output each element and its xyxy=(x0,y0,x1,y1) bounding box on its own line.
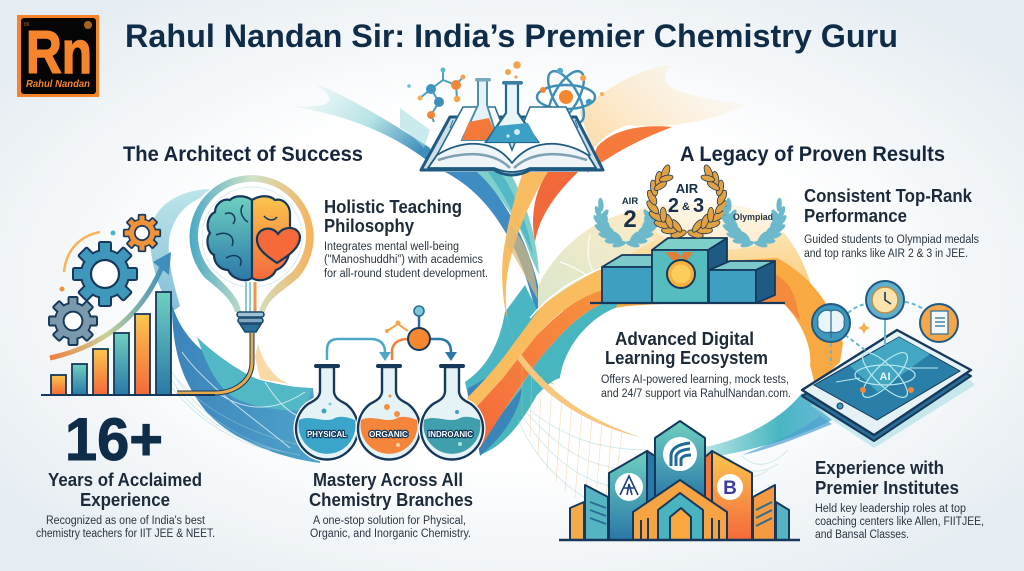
text: holistic teaching: Integrates mental well-being xyxy=(324,241,459,253)
wreath: AIR 2 & 3: AIR xyxy=(676,181,699,196)
icon: light bulb brain and heart xyxy=(190,175,314,332)
icon: tablet xyxy=(802,330,975,448)
central strands from book xyxy=(477,172,539,275)
lower teal xyxy=(700,393,832,459)
text: mastery across branches: Organic, and Inorganic Chemistry. xyxy=(310,528,471,540)
panel: chemistry branches xyxy=(296,306,483,540)
title: Rahul Nandan Sir: India’s Premier Chemistry Guru xyxy=(125,18,898,54)
icon: document circle xyxy=(920,304,958,342)
icon: physical flask xyxy=(296,364,358,459)
logo: Rn: 86 xyxy=(24,22,30,28)
panel: 16+ years xyxy=(36,215,215,540)
wreath: AIR 2: 2 xyxy=(623,206,637,233)
wreath: AIR 2 xyxy=(592,196,660,249)
AI atom: AI xyxy=(880,371,890,383)
icon: organic flask xyxy=(358,364,420,459)
text: consistent top rank: Consistent Top-Rank xyxy=(804,186,973,206)
panel: consistent top-rank performance xyxy=(590,164,979,303)
text: mastery across branches: Chemistry Branches xyxy=(309,490,473,510)
text: premier institutes xyxy=(815,458,984,541)
text: premier institutes: Held key leadership roles at top xyxy=(815,503,966,515)
text: years of experience: Recognized as one of India's best xyxy=(46,515,206,527)
upper swooshes xyxy=(287,83,438,170)
text: advanced digital: Advanced Digital xyxy=(615,329,754,349)
text: mastery across branches: A one-stop solution for Physical, xyxy=(313,515,466,527)
white centre xyxy=(560,303,810,447)
text: premier institutes: and Bansal Classes. xyxy=(815,529,909,541)
text: years of experience: Years of Acclaimed xyxy=(48,470,202,490)
icon: podium xyxy=(590,238,785,303)
wreath: AIR 2 & 3: & xyxy=(679,201,693,213)
text: holistic teaching: Holistic Teaching xyxy=(324,197,462,217)
icon: inorganic flask xyxy=(421,364,483,459)
brain left half xyxy=(207,196,252,280)
logo: Rn: Rn xyxy=(26,19,92,86)
logo: Rn xyxy=(17,15,99,97)
book cover xyxy=(421,117,603,175)
section heading: A Legacy of Proven Results: A Legacy of Proven Results xyxy=(680,143,945,166)
text: holistic teaching: Philosophy xyxy=(324,216,414,236)
text: holistic teaching xyxy=(324,197,488,280)
section heading: The Architect of Success: The Architect of Success xyxy=(123,143,363,166)
text: consistent top rank xyxy=(804,186,979,260)
wreath: AIR 2: AIR xyxy=(622,196,638,207)
flask labels: INDROANIC xyxy=(428,430,473,439)
icon: buildings xyxy=(559,421,800,540)
mesh line fan xyxy=(172,353,788,510)
atom xyxy=(537,66,604,128)
orange flask xyxy=(462,80,498,140)
main diagonal bands xyxy=(480,298,620,455)
icon: brain circle xyxy=(812,304,850,342)
wreath: AIR 2 & 3: 3 xyxy=(693,195,704,217)
wreath: AIR 2 & 3: 2 xyxy=(668,195,679,217)
panel: digital learning ecosystem xyxy=(601,281,975,448)
panel: premier institutes xyxy=(559,421,984,541)
logo B xyxy=(717,474,743,500)
flask labels xyxy=(307,430,473,439)
icon: clock circle xyxy=(866,281,904,319)
text: holistic teaching: for all-round student development. xyxy=(324,268,488,280)
icon: wire from bulb xyxy=(177,333,252,393)
text: holistic teaching: ("Manoshuddhi") with academics xyxy=(324,254,483,266)
icon: open book with flasks and atom xyxy=(407,61,604,175)
left arc ribbon xyxy=(150,189,210,312)
text: mastery across branches: Mastery Across All xyxy=(313,470,463,490)
wreath: AIR 2 & 3 xyxy=(645,164,729,240)
text: advanced digital xyxy=(601,329,791,400)
orange gear xyxy=(124,215,160,251)
teal flask xyxy=(486,83,538,142)
text: premier institutes: Premier Institutes xyxy=(815,478,959,498)
gray gear xyxy=(49,297,97,345)
text: years of experience: Experience xyxy=(80,490,170,510)
wreath: Olympiad: Olympiad xyxy=(733,212,773,222)
orange ring top xyxy=(600,258,843,385)
icon: connecting arrows xyxy=(327,306,457,361)
text: years of experience xyxy=(36,470,215,540)
AI atom xyxy=(836,347,938,403)
logo A xyxy=(615,473,643,501)
text: consistent top rank: Guided students to Olympiad medals xyxy=(804,234,979,246)
icon: sparkle xyxy=(858,322,870,334)
bar chart with arrow xyxy=(41,252,215,395)
blue gear xyxy=(73,242,137,306)
text: mastery across branches xyxy=(309,470,473,540)
text: consistent top rank: Performance xyxy=(804,206,907,226)
text: premier institutes: Experience with xyxy=(815,458,944,478)
big number: 16+ xyxy=(65,406,163,473)
connectors xyxy=(831,302,930,365)
flowing ribbons background xyxy=(150,65,843,463)
panel: holistic teaching philosophy xyxy=(190,175,488,332)
heart xyxy=(257,228,300,263)
molecule xyxy=(407,68,466,122)
flask labels: ORGANIC xyxy=(369,430,408,439)
logo F xyxy=(663,437,697,471)
logo: Rn: Rahul Nandan xyxy=(26,79,90,90)
text: premier institutes: coaching centers like Allen, FIITJEE, xyxy=(815,516,984,528)
front pages xyxy=(428,144,596,172)
text: advanced digital: and 24/7 support via RahulNandan.com. xyxy=(601,388,791,400)
brain right half xyxy=(252,196,290,280)
logo B: B xyxy=(723,478,737,499)
text: advanced digital: Learning Ecosystem xyxy=(605,348,768,368)
flask labels: PHYSICAL xyxy=(307,430,347,439)
text: advanced digital: Offers AI-powered learning, mock tests, xyxy=(601,374,789,386)
wreath: Olympiad xyxy=(720,198,788,249)
back pages xyxy=(437,107,590,165)
text: years of experience: chemistry teachers for IIT JEE & NEET. xyxy=(36,528,215,540)
icon: gears xyxy=(49,215,160,345)
icon: medal xyxy=(665,252,695,288)
text: consistent top rank: and top ranks like AIR 2 & 3 in JEE. xyxy=(804,248,968,260)
hill behind podium xyxy=(530,203,815,312)
